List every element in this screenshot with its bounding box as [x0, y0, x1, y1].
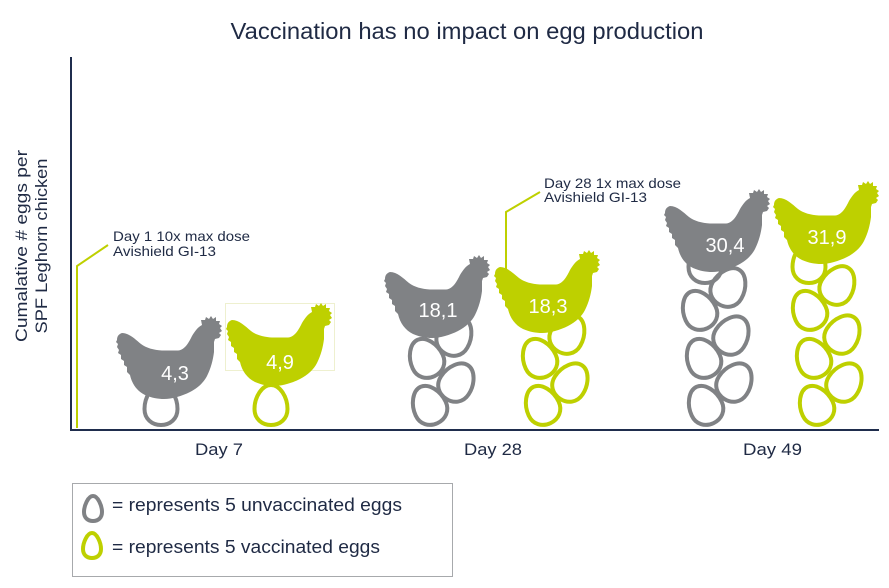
legend text: unvaccinated: = represents 5 unvaccinated eggs: [112, 494, 402, 515]
group: day 7 unvaccinated: 4,3: [161, 363, 189, 385]
group: day 49 unvaccinated: [664, 189, 770, 430]
group: day 28 unvaccinated: 18,1: [419, 300, 457, 322]
group: day 49 vaccinated: 31,9: [808, 227, 846, 249]
group: day 7 unvaccinated: [116, 316, 222, 425]
x axis labels: [195, 440, 802, 459]
y axis label: Cumalative # eggs per: [12, 150, 31, 342]
x axis labels: Day 49: [743, 440, 802, 459]
icon: unvaccinated egg: [84, 496, 102, 521]
legend text: vaccinated: = represents 5 vaccinated eggs: [112, 536, 380, 557]
group: day 49 unvaccinated: 30,4: [706, 235, 744, 257]
chart axes: [71, 57, 879, 430]
callout: day 28 dose: Avishield GI-13: [544, 189, 647, 205]
x axis labels: Day 28: [464, 440, 522, 459]
legend: [72, 484, 452, 576]
callout: day 1 dose: Avishield GI-13: [113, 243, 216, 259]
group: day 28 unvaccinated: [384, 255, 490, 430]
callout: day 1 dose: Day 1 10x max dose: [113, 228, 250, 244]
group: day 49 vaccinated: [773, 181, 879, 430]
y axis label: [12, 150, 51, 342]
group: day 28 vaccinated: 18,3: [529, 296, 567, 318]
callout: day 28 dose: [506, 175, 681, 270]
x axis labels: Day 7: [195, 440, 243, 459]
group: day 7 vaccinated: 4,9: [266, 352, 294, 374]
icon: vaccinated egg: [83, 533, 101, 558]
y axis label: SPF Leghorn chicken: [32, 158, 51, 334]
group: day 28 vaccinated: [494, 250, 600, 430]
callout: day 28 dose: Day 28 1x max dose: [544, 175, 681, 191]
title: Vaccination has no impact on egg production: [230, 18, 704, 44]
callout: day 1 dose: [77, 228, 250, 428]
group: day 7 vaccinated: [226, 303, 334, 425]
